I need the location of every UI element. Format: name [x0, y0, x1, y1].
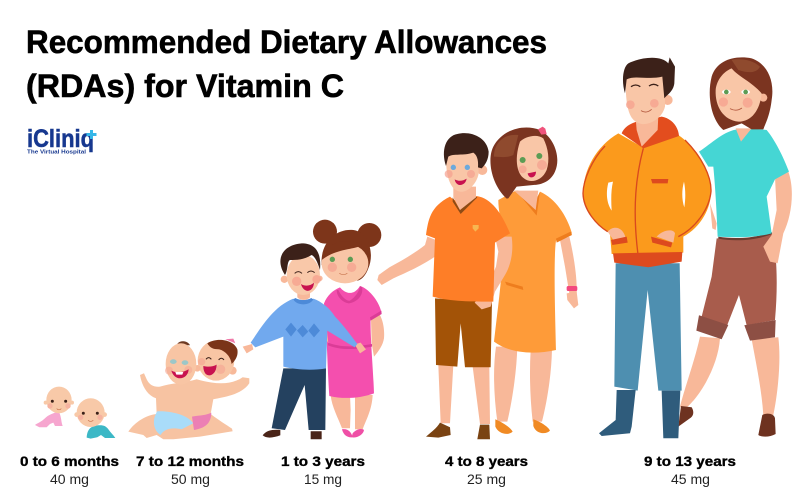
woman in teal t-shirt [678, 57, 792, 437]
label: 1 to 3 years [281, 453, 365, 487]
title: Recommended Dietary Allowances [26, 24, 547, 60]
label: 9 to 13 years [644, 453, 736, 487]
logo: iCliniq: The Virtual Hospital [27, 150, 87, 156]
label: 1 to 3 years: 15 mg [304, 472, 342, 487]
title [26, 24, 547, 104]
illustration: babies 0 to 6 months [35, 387, 115, 439]
label: 4 to 8 years [445, 453, 528, 487]
baby in teal [74, 398, 115, 439]
second baby head [198, 339, 238, 381]
first baby head [165, 341, 201, 385]
label: 1 to 3 years: 1 to 3 years [281, 453, 365, 469]
illustration: children 9 to 13 years [583, 57, 792, 438]
torso and limbs [128, 373, 249, 439]
man in orange t-shirt [377, 133, 512, 439]
baby in pink [35, 387, 74, 427]
label: 4 to 8 years: 4 to 8 years [445, 453, 528, 469]
illustration: children 4 to 8 years [377, 127, 578, 439]
logo: iCliniq: iCliniq [27, 125, 94, 153]
label: 7 to 12 months: 50 mg [171, 472, 210, 487]
woman in orange dress [490, 127, 578, 434]
label: 7 to 12 months [136, 453, 244, 487]
illustration: babies 7 to 12 months [128, 339, 249, 439]
man in orange jacket [583, 57, 711, 438]
label: 0 to 6 months: 0 to 6 months [20, 453, 119, 469]
blue diaper [154, 411, 193, 435]
label: 9 to 13 years: 45 mg [671, 472, 710, 487]
label: 4 to 8 years: 25 mg [467, 472, 506, 487]
title: (RDAs) for Vitamin C [26, 68, 344, 104]
illustration: children 1 to 3 years [243, 220, 384, 439]
pink diaper [192, 413, 211, 430]
boy in blue sweater [243, 243, 366, 439]
label: 7 to 12 months: 7 to 12 months [136, 453, 244, 469]
girl in pink dress [313, 220, 384, 437]
label: 0 to 6 months: 40 mg [50, 472, 89, 487]
label: 0 to 6 months [20, 453, 119, 487]
label: 9 to 13 years: 9 to 13 years [644, 453, 736, 469]
